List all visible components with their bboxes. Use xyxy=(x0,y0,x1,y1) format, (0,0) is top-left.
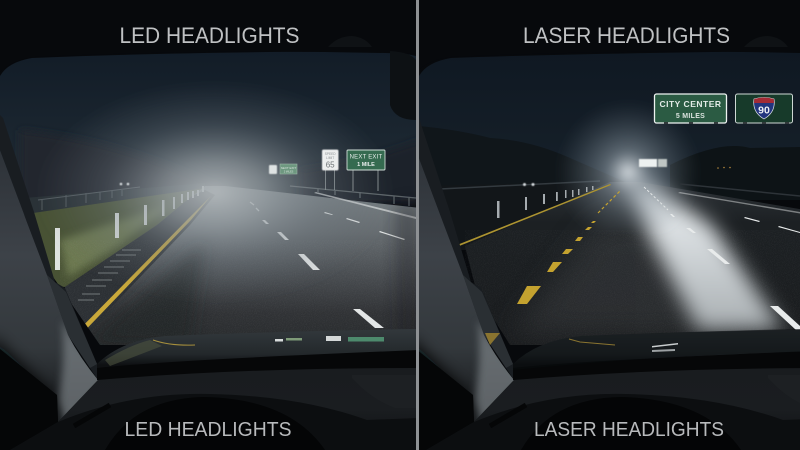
laser sky glow xyxy=(564,109,692,230)
LED speed limit sign xyxy=(322,150,338,190)
LED dark hills xyxy=(24,135,56,140)
laser right guard rail xyxy=(680,184,800,196)
laser far overhead sign xyxy=(639,159,667,167)
laser hood reflections xyxy=(485,333,678,352)
LED white lane dashes xyxy=(250,192,416,328)
laser city center sign xyxy=(654,94,726,124)
LED asphalt road xyxy=(65,186,420,345)
laser night sky xyxy=(419,50,800,190)
LED car interior xyxy=(0,36,416,422)
LED verge behind grass xyxy=(30,192,106,213)
LED road shading xyxy=(112,248,205,337)
interstate shield: 90 xyxy=(758,104,770,116)
laser roadside posts xyxy=(497,186,594,218)
LED title bottom: LED HEADLIGHTS xyxy=(124,419,292,441)
LED roadside grass xyxy=(34,194,184,287)
LED right road edge shading xyxy=(395,200,420,345)
LED speed limit sign: LIMIT xyxy=(326,156,334,160)
laser yellow center dashes xyxy=(517,190,621,304)
LED title top: LED HEADLIGHTS xyxy=(120,23,300,48)
LED hood reflections xyxy=(105,336,384,366)
laser roadside ground xyxy=(446,200,568,250)
laser asphalt road xyxy=(465,182,800,345)
laser distant town lights xyxy=(717,167,731,169)
LED hazy small road signs: NEXT EXIT xyxy=(281,166,296,170)
laser car interior xyxy=(406,0,800,450)
panel divider xyxy=(416,0,419,450)
LED right guard rail xyxy=(290,186,416,206)
LED next exit sign: NEXT EXIT xyxy=(350,154,382,160)
laser oncoming headlights xyxy=(523,183,534,186)
LED rumble strip xyxy=(78,250,141,300)
LED speed limit sign: SPEED xyxy=(325,152,336,156)
LED next exit sign: 1 MILE xyxy=(357,162,375,168)
laser hood shade xyxy=(513,329,800,370)
laser white lane dashes xyxy=(644,187,800,330)
laser far guard rail xyxy=(440,181,600,189)
panel: laser headlights view xyxy=(419,28,800,436)
LED asphalt texture xyxy=(60,240,416,345)
LED oncoming headlights xyxy=(120,183,129,185)
laser road beam xyxy=(626,180,784,330)
LED next exit sign xyxy=(347,150,385,191)
LED far guard rail xyxy=(38,187,140,210)
laser windshield scene xyxy=(419,50,800,345)
laser city center sign: CITY CENTER xyxy=(659,99,722,109)
laser city center sign: 5 MILES xyxy=(676,113,705,120)
LED yellow edge line xyxy=(85,198,208,328)
LED reflective roadside posts xyxy=(55,186,204,270)
laser dark hills xyxy=(422,126,602,186)
laser interstate 90 sign xyxy=(736,94,792,124)
laser asphalt texture xyxy=(465,230,800,345)
laser title top: LASER HEADLIGHTS xyxy=(523,23,730,48)
laser road light spill xyxy=(528,224,695,334)
LED windshield scene xyxy=(0,50,420,345)
LED hazy small road signs: 2 MILES xyxy=(284,170,294,174)
LED hazy small road signs xyxy=(269,164,297,174)
LED foggy sky xyxy=(0,50,416,200)
laser title bottom: LASER HEADLIGHTS xyxy=(534,419,724,441)
LED dark shoulder xyxy=(65,190,211,330)
LED fog glow xyxy=(58,93,374,286)
panel: LED headlights view xyxy=(0,28,416,436)
LED right tree line xyxy=(351,161,416,206)
laser yellow edge line xyxy=(457,184,611,246)
LED speed limit sign: 65 xyxy=(326,160,335,170)
